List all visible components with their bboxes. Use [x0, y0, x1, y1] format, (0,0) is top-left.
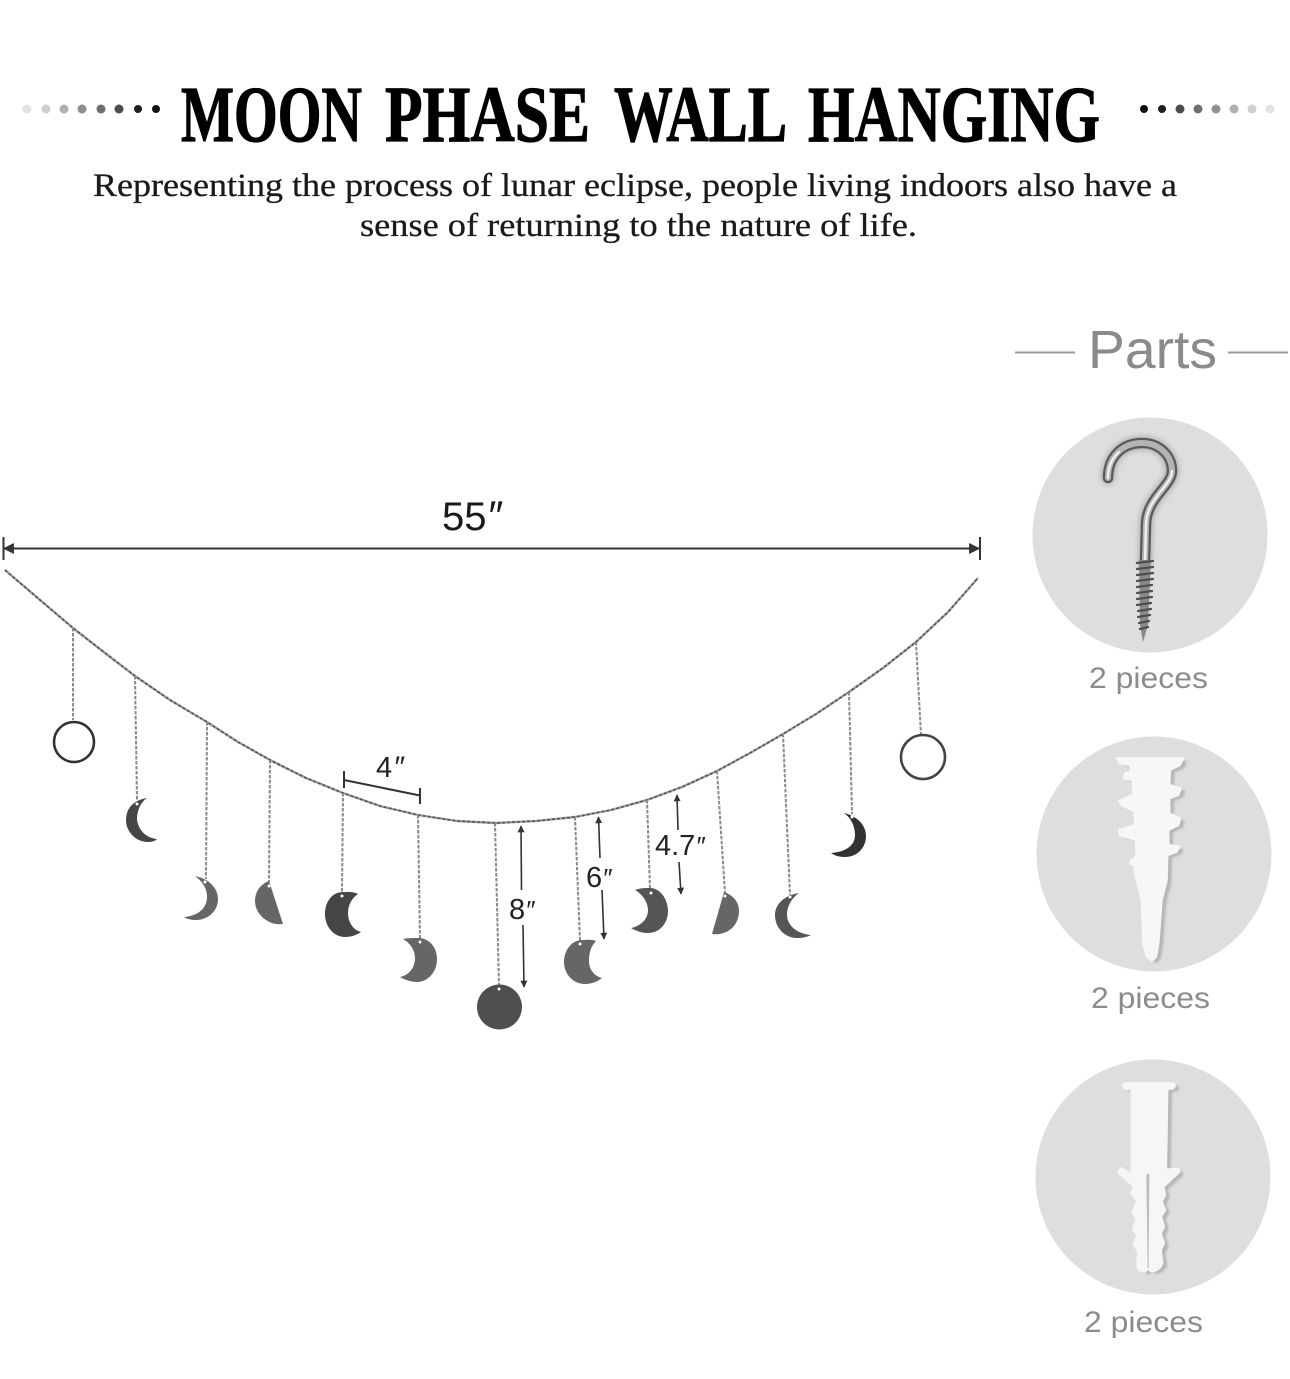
moon phase pendants	[54, 722, 945, 1030]
full moon	[477, 984, 522, 1030]
title: HANGING	[808, 72, 1100, 159]
crescent 3	[184, 876, 218, 920]
panel: parts	[1015, 320, 1288, 1339]
overall width dimension 55 inches: 55	[442, 495, 486, 539]
icon: expansion anchor	[1118, 1083, 1184, 1274]
icon: threaded anchor	[1117, 758, 1187, 963]
dimension 4.7 inches	[655, 795, 705, 894]
gibbous 8	[564, 940, 602, 984]
gibbous 5	[325, 892, 361, 937]
ring left	[54, 722, 94, 762]
part: screw hook	[1032, 418, 1268, 695]
crescent 12	[831, 813, 866, 857]
panel: wall hanging diagram	[4, 492, 980, 1030]
dimension 4 inches	[344, 751, 420, 804]
subtitle	[93, 168, 1177, 244]
label: expansion anchor quantity: 2 pieces	[1084, 1306, 1203, 1339]
half moon 10	[712, 892, 739, 934]
dimension 4.7 inches: 4.7″	[655, 830, 705, 862]
left dotted ornament	[22, 104, 160, 114]
main chain	[5, 570, 978, 823]
header	[22, 72, 1274, 244]
title: PHASE	[385, 72, 590, 159]
overall width dimension 55 inches	[4, 492, 980, 560]
title	[181, 72, 1100, 159]
part: expansion anchor	[1036, 1060, 1270, 1339]
part: plastic screw anchor	[1036, 736, 1272, 1015]
gibbous 9	[631, 888, 668, 933]
label: screw hook quantity: 2 pieces	[1089, 662, 1208, 695]
title: WALL	[614, 72, 787, 159]
parts heading: Parts	[1088, 320, 1217, 380]
ring right	[901, 735, 945, 779]
right dotted ornament	[1140, 104, 1274, 114]
hanging chains	[73, 628, 921, 986]
label: threaded anchor quantity: 2 pieces	[1091, 982, 1210, 1015]
subtitle: sense of returning to the nature of life.	[360, 208, 917, 244]
gibbous 6	[400, 938, 437, 982]
crescent 11	[775, 893, 811, 938]
dimension 6 inches	[586, 817, 612, 939]
crescent 2	[126, 798, 157, 842]
pendant holes	[136, 802, 854, 990]
half moon 4	[255, 881, 283, 924]
dimension 8 inches: 8″	[509, 894, 535, 926]
overall width dimension 55 inches: ″	[486, 492, 504, 539]
dimension 4 inches: 4″	[376, 751, 405, 784]
title: MOON	[181, 72, 362, 159]
icon: screw hook	[1108, 443, 1172, 642]
subtitle: Representing the process of lunar eclipse, people living indoors also have a	[93, 168, 1177, 204]
dimension 6 inches: 6″	[586, 862, 612, 894]
